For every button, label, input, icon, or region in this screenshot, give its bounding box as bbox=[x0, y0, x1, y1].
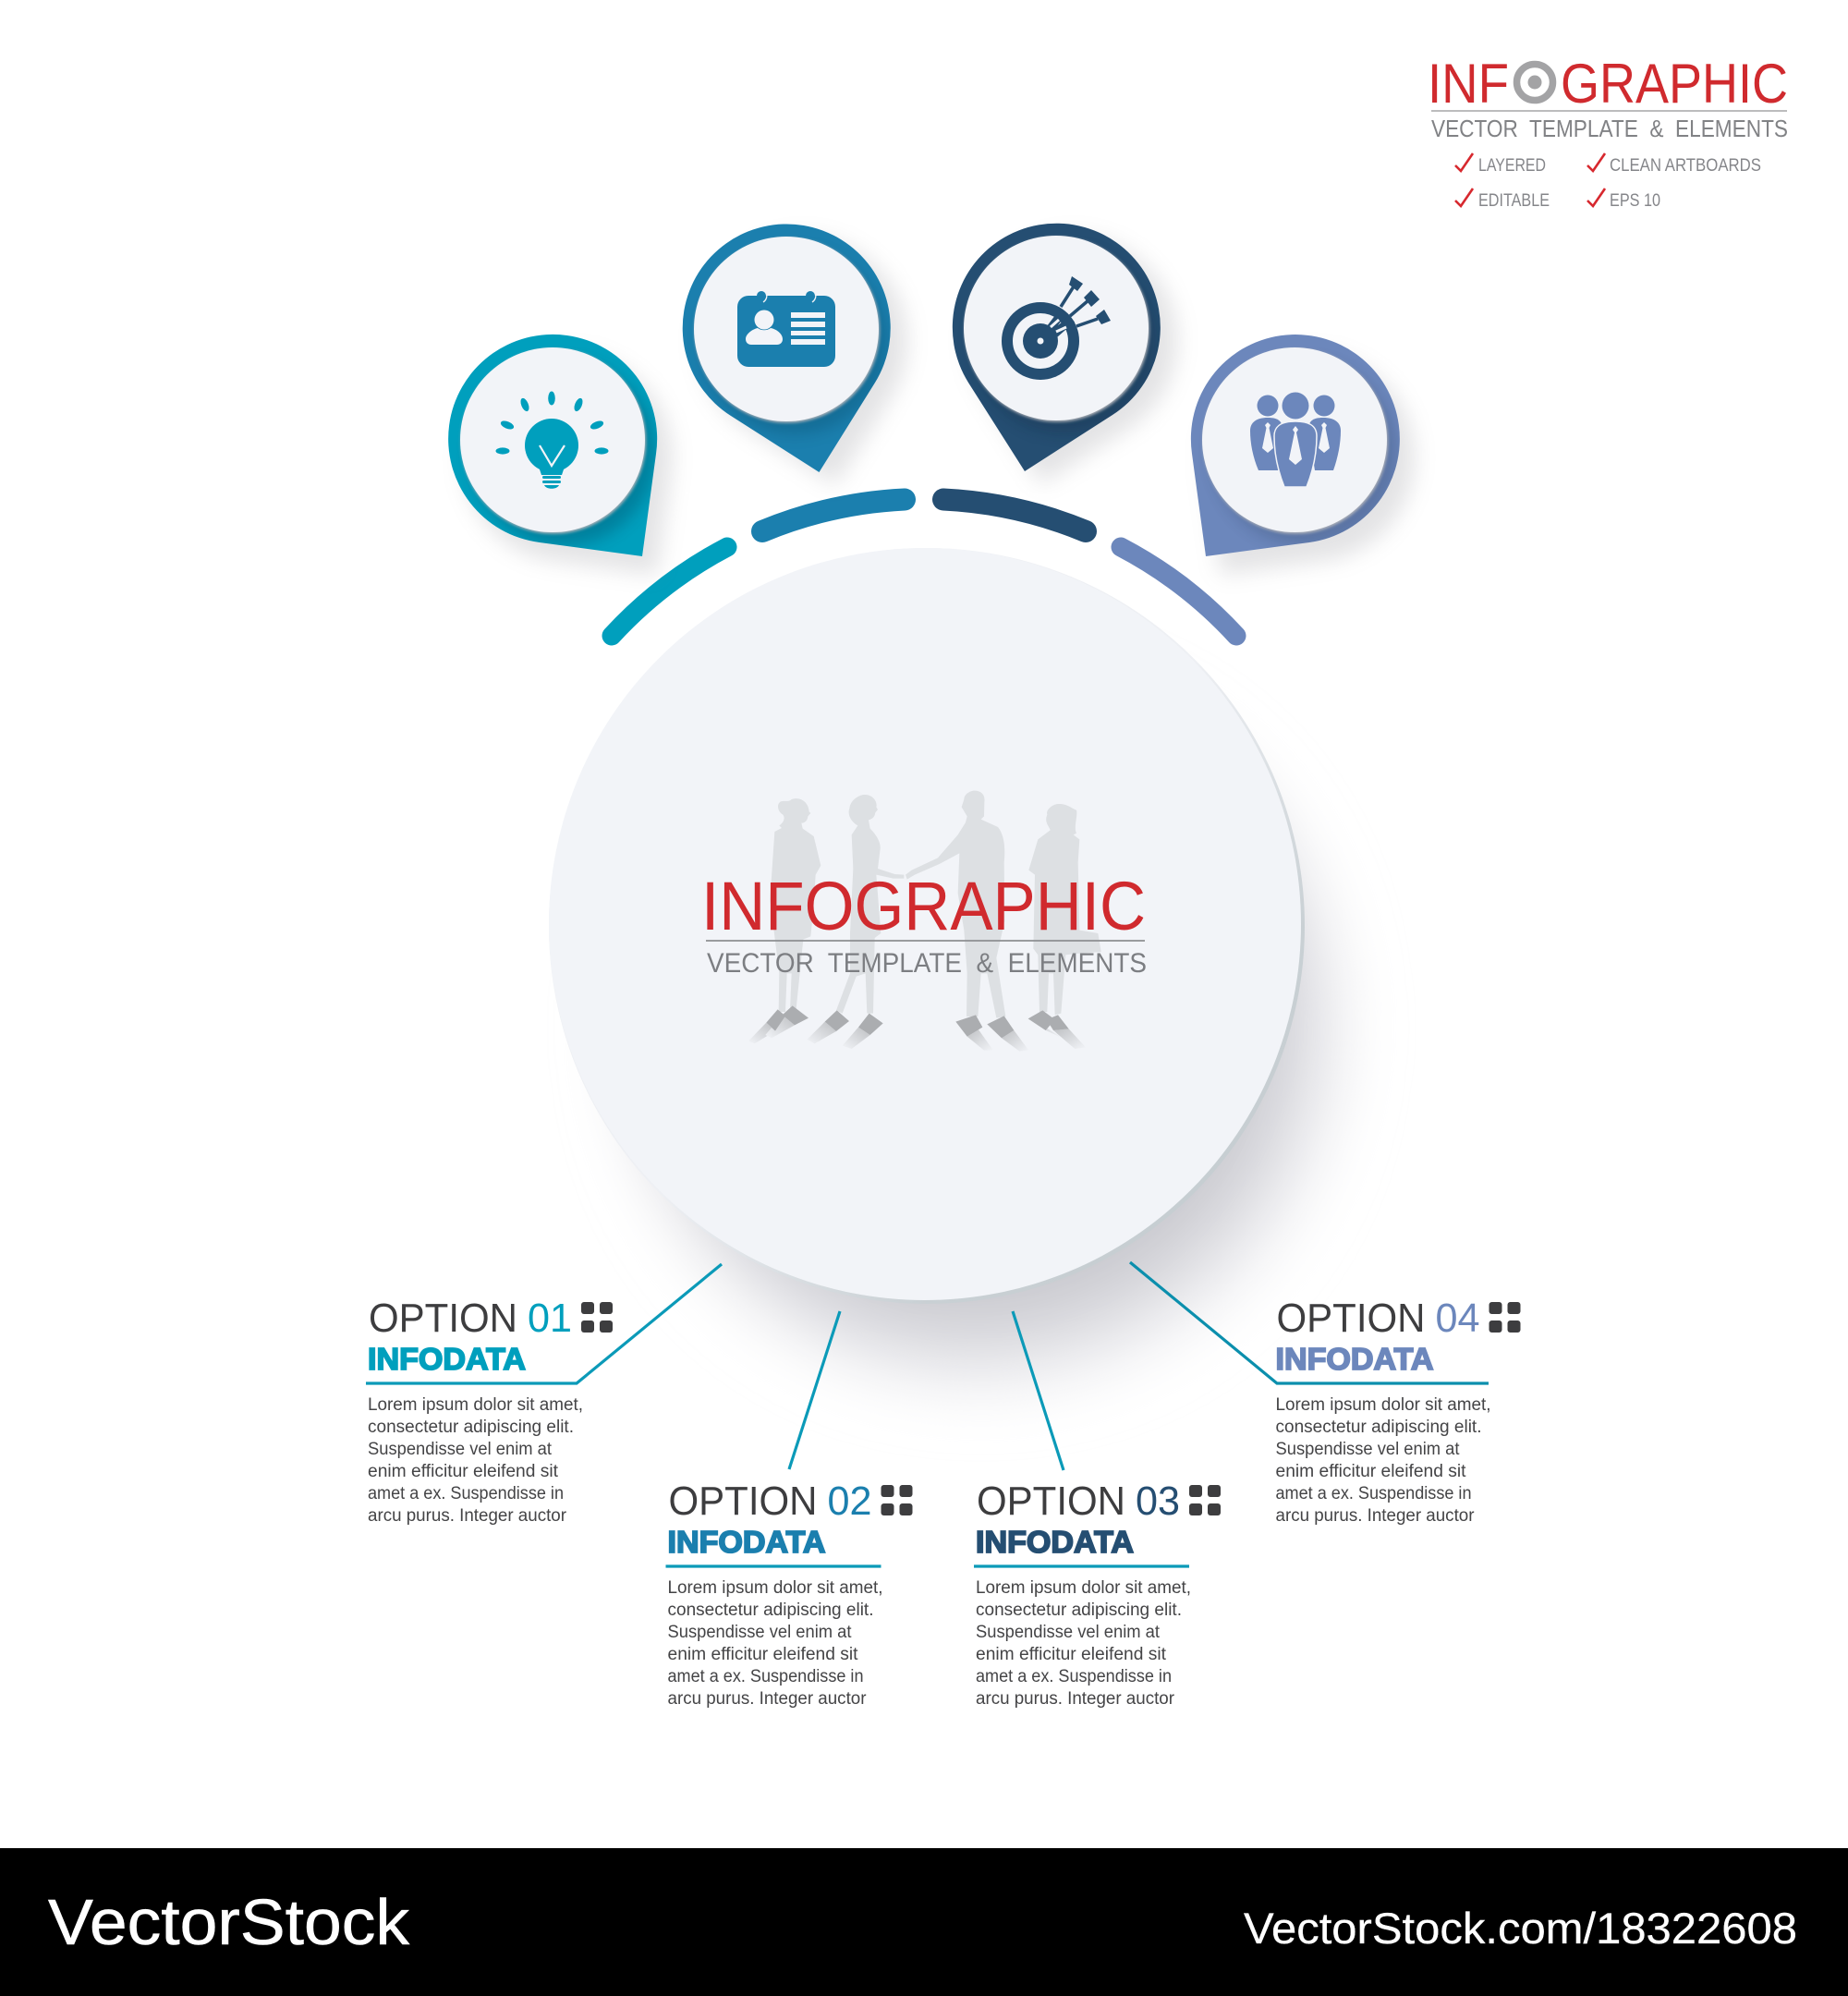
logo subtitle: VECTOR TEMPLATE & ELEMENTS bbox=[1431, 115, 1788, 142]
option 01 squares icon bbox=[581, 1302, 613, 1333]
icon: target with arrows bbox=[1007, 276, 1111, 374]
connector line 2 bbox=[789, 1311, 840, 1469]
feature checklist bbox=[1455, 153, 1761, 211]
option 03 heading: OPTION bbox=[977, 1479, 1125, 1524]
icon: team of three bbox=[1250, 392, 1341, 487]
option 03 body text: arcu purus. Integer auctor bbox=[976, 1689, 1175, 1709]
option 03 body text: consectetur adipiscing elit. bbox=[976, 1600, 1182, 1620]
option 01 body text: Lorem ipsum dolor sit amet, bbox=[368, 1395, 583, 1415]
option 02 heading: 02 bbox=[828, 1479, 872, 1524]
icon: id card bbox=[737, 291, 835, 367]
option 01 heading: OPTION bbox=[369, 1296, 517, 1341]
shadow of central disc bbox=[626, 672, 1337, 1383]
option 02 subheading: INFODATA bbox=[667, 1525, 826, 1559]
option 04 body text bbox=[1275, 1395, 1491, 1526]
feature checklist: EDITABLE bbox=[1478, 191, 1550, 211]
arc segment 1 bbox=[612, 547, 727, 636]
logo title: INF bbox=[1428, 53, 1509, 115]
option 02 body text: arcu purus. Integer auctor bbox=[667, 1689, 867, 1709]
connector line 3 bbox=[1013, 1311, 1064, 1470]
pin 1: light bulb bbox=[448, 335, 672, 575]
option 01 body text: consectetur adipiscing elit. bbox=[368, 1418, 574, 1437]
option 04 body text: consectetur adipiscing elit. bbox=[1275, 1418, 1482, 1437]
pin 3: target bbox=[953, 224, 1177, 484]
option 02 body text: enim efficitur eleifend sit bbox=[667, 1645, 858, 1664]
feature checklist: LAYERED bbox=[1478, 156, 1546, 176]
option 02 body text: amet a ex. Suspendisse in bbox=[667, 1667, 863, 1686]
option 03 subheading: INFODATA bbox=[976, 1525, 1134, 1559]
option 02 body text: consectetur adipiscing elit. bbox=[667, 1600, 874, 1620]
option 04 heading: 04 bbox=[1436, 1296, 1480, 1341]
option 01 body text bbox=[368, 1395, 583, 1526]
option 02 bbox=[665, 1479, 913, 1709]
arc segment 4 bbox=[1121, 547, 1236, 636]
option 04 body text: Suspendisse vel enim at bbox=[1275, 1440, 1460, 1459]
option 03 body text: enim efficitur eleifend sit bbox=[976, 1645, 1167, 1664]
business people silhouettes bbox=[748, 791, 1101, 1052]
subtitle text: VECTOR TEMPLATE & ELEMENTS bbox=[707, 948, 1147, 979]
option 01 body text: arcu purus. Integer auctor bbox=[368, 1506, 567, 1526]
option 01 bbox=[368, 1296, 613, 1526]
footer bar bbox=[0, 1848, 1848, 1996]
top-right logo block bbox=[1428, 53, 1788, 211]
option 02 body text: Lorem ipsum dolor sit amet, bbox=[667, 1578, 883, 1598]
option 03 body text: Suspendisse vel enim at bbox=[976, 1623, 1161, 1642]
logo target ring bbox=[1517, 65, 1552, 100]
arc segment 3 bbox=[943, 499, 1086, 531]
option 02 body text: Suspendisse vel enim at bbox=[667, 1623, 852, 1642]
option 04 body text: enim efficitur eleifend sit bbox=[1275, 1462, 1466, 1481]
option 03 heading: 03 bbox=[1136, 1479, 1180, 1524]
connector line 1 bbox=[366, 1264, 722, 1383]
option 04 heading: OPTION bbox=[1277, 1296, 1425, 1341]
arc segment 2 bbox=[762, 499, 905, 531]
option 01 heading: 01 bbox=[528, 1296, 572, 1341]
central disc bbox=[549, 548, 1305, 1304]
feature checklist: CLEAN ARTBOARDS bbox=[1610, 156, 1761, 176]
footer url: VectorStock.com/18322608 bbox=[1244, 1904, 1797, 1953]
option 04 subheading: INFODATA bbox=[1275, 1342, 1434, 1376]
option 04 squares icon bbox=[1489, 1302, 1521, 1333]
option 04 body text: Lorem ipsum dolor sit amet, bbox=[1275, 1395, 1491, 1415]
option 03 body text bbox=[976, 1578, 1191, 1709]
title text: INFOGRAPHIC bbox=[701, 868, 1146, 944]
option 02 body text bbox=[667, 1578, 883, 1709]
feature checklist: EPS 10 bbox=[1610, 191, 1660, 211]
central title bbox=[701, 868, 1147, 979]
option 02 squares icon bbox=[881, 1485, 913, 1515]
footer brand: VectorStock bbox=[48, 1886, 410, 1958]
logo title bbox=[1428, 53, 1788, 115]
option 03 body text: amet a ex. Suspendisse in bbox=[976, 1667, 1172, 1686]
option 04 body text: amet a ex. Suspendisse in bbox=[1275, 1484, 1471, 1503]
option 01 body text: amet a ex. Suspendisse in bbox=[368, 1484, 564, 1503]
option 04 body text: arcu purus. Integer auctor bbox=[1275, 1506, 1475, 1526]
option 01 body text: enim efficitur eleifend sit bbox=[368, 1462, 559, 1481]
icon: light bulb bbox=[495, 392, 608, 489]
option 03 squares icon bbox=[1189, 1485, 1221, 1515]
pin 4: team bbox=[1191, 335, 1415, 575]
connector line 4 bbox=[1130, 1262, 1489, 1383]
pin 2: id card bbox=[683, 224, 907, 485]
option 01 body text: Suspendisse vel enim at bbox=[368, 1440, 553, 1459]
option 02 heading: OPTION bbox=[669, 1479, 817, 1524]
option 04 bbox=[1275, 1296, 1521, 1526]
option 01 subheading: INFODATA bbox=[368, 1342, 526, 1376]
option 03 body text: Lorem ipsum dolor sit amet, bbox=[976, 1578, 1191, 1598]
option 03 bbox=[974, 1479, 1221, 1709]
logo title: GRAPHIC bbox=[1561, 53, 1788, 115]
